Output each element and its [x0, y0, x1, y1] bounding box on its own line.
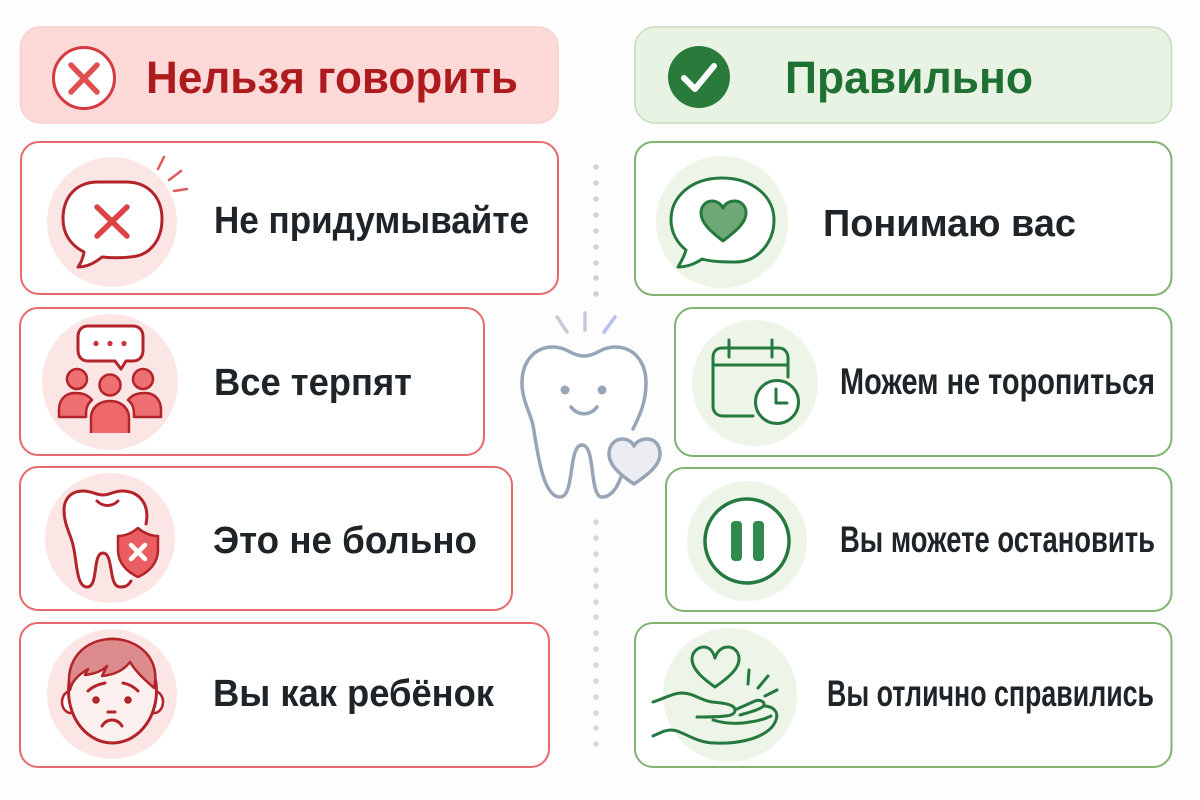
icon: speech bubble with heart: [656, 156, 788, 288]
label: Понимаю вас: [823, 203, 1076, 245]
label: Все терпят: [214, 362, 412, 404]
icon: hand holding heart: [653, 628, 797, 762]
center dotted divider bottom: [593, 519, 599, 747]
panel: you are like a child: [20, 623, 549, 767]
icon: group with speech bubble: [42, 314, 178, 450]
heading: forbidden: Нельзя говорить: [146, 52, 518, 103]
icon: calendar with clock: [692, 320, 818, 446]
icon: speech bubble with cross: [47, 157, 187, 287]
panel: you did great: [635, 623, 1172, 767]
icon: check in circle: [668, 46, 730, 108]
label: Это не больно: [213, 520, 477, 562]
icon: pause button: [687, 481, 807, 601]
center dotted divider top: [593, 164, 599, 297]
panel: do not make things up: [21, 142, 558, 294]
panel: I understand you: [635, 142, 1172, 295]
heading: correct: Правильно: [785, 52, 1033, 103]
panel: we can take our time: [675, 308, 1172, 456]
icon: central smiling tooth with heart: [522, 313, 660, 497]
panel: everyone endures: [20, 308, 484, 455]
panel: header forbidden: [20, 27, 558, 123]
icon: tooth with shield: [45, 473, 175, 603]
panel: you can stop: [666, 468, 1172, 611]
icon: cross in circle: [54, 48, 114, 108]
panel: it does not hurt: [20, 467, 512, 610]
label: Не придумывайте: [214, 200, 529, 242]
icon: sad child face: [47, 629, 177, 759]
label: Вы как ребёнок: [213, 673, 495, 715]
panel: header correct: [635, 27, 1172, 123]
